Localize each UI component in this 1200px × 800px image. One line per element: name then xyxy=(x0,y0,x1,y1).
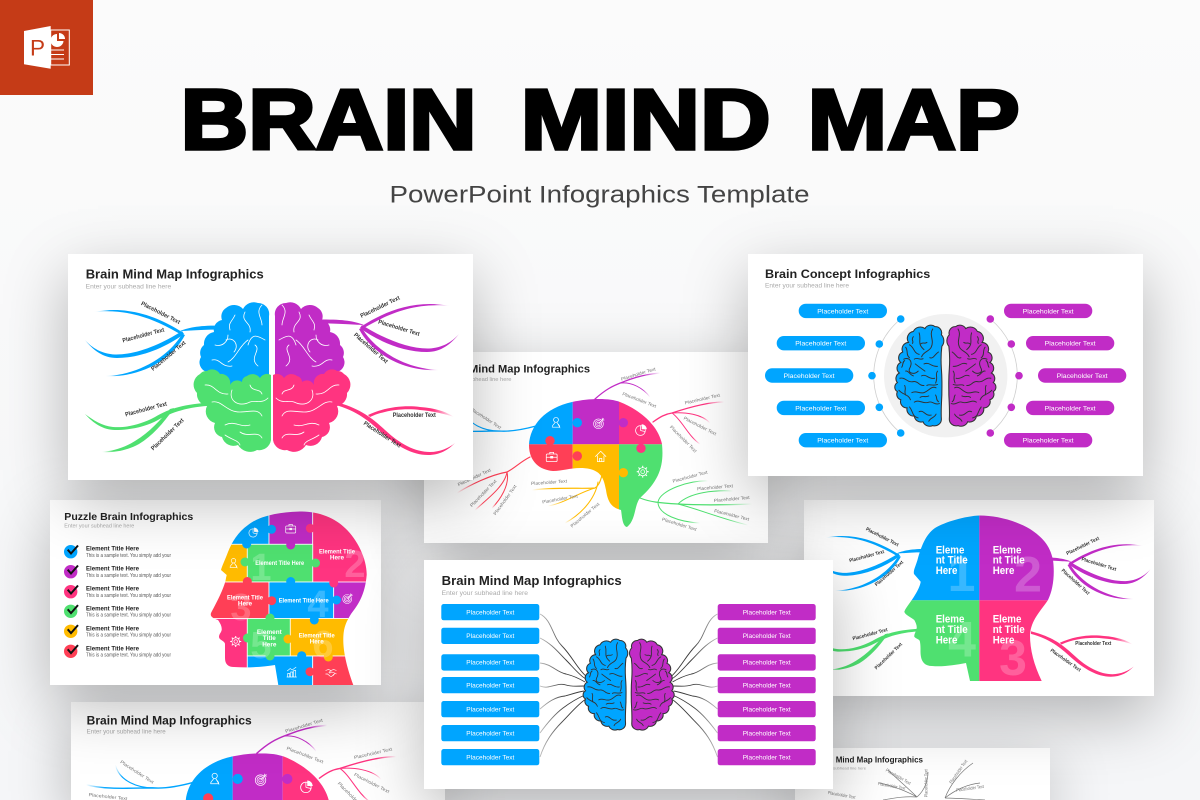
branch labels: Placeholder Text xyxy=(125,402,168,418)
purple dots xyxy=(986,315,1023,437)
piece numerals: 1 xyxy=(250,547,272,589)
branch labels: Placeholder Text xyxy=(669,425,698,454)
quadrant 1 label: Here xyxy=(936,565,957,577)
checklist item 2: Element Title Here xyxy=(86,567,140,573)
checklist item 2 xyxy=(64,565,171,579)
checklist item 1 xyxy=(64,545,171,559)
slide card: brain with button lists xyxy=(424,560,833,789)
slide subhead: Enter your subhead line here xyxy=(442,590,529,597)
pill labels: Placeholder Text xyxy=(817,438,868,445)
purple buttons xyxy=(718,604,816,765)
branch labels xyxy=(849,526,1117,674)
slide heading: Brain Mind Map Infographics xyxy=(813,755,923,765)
checklist item 6 xyxy=(64,645,171,659)
slide subhead: Enter your subhead line here xyxy=(438,377,512,383)
piece numerals: 6 xyxy=(312,624,334,666)
right wires xyxy=(670,614,718,757)
branch labels: Placeholder Text xyxy=(865,526,900,548)
branch labels: Placeholder Text xyxy=(924,769,928,797)
slide subhead: Enter your subhead line here xyxy=(64,524,135,530)
button labels xyxy=(466,609,791,761)
branch labels: Placeholder Text xyxy=(286,746,325,765)
piece labels: Element Title xyxy=(299,632,335,639)
branch labels xyxy=(457,366,751,532)
main title: MAP xyxy=(808,73,1020,168)
checklist item 6: Element Title Here xyxy=(86,646,140,652)
quadrant 3 label xyxy=(993,614,1025,646)
branch labels: Placeholder Text xyxy=(672,469,709,484)
puzzle head xyxy=(210,512,367,685)
thin gray mind map branches xyxy=(880,763,985,800)
piece icons xyxy=(230,524,353,677)
branch labels: Placeholder Text xyxy=(1049,648,1082,674)
slide card: head quadrants mind map xyxy=(804,500,1154,696)
branch labels: Placeholder Text xyxy=(956,784,985,793)
blue hemisphere xyxy=(583,639,628,730)
branch labels: Placeholder Text xyxy=(877,781,907,791)
piece numerals: 5 xyxy=(250,625,272,667)
branch labels: Placeholder Text xyxy=(570,501,601,528)
slide heading: Puzzle Brain Infographics xyxy=(64,512,194,523)
big numerals: 3 xyxy=(999,630,1027,686)
piece numerals: 2 xyxy=(344,544,366,586)
branch labels: Placeholder Text xyxy=(542,493,579,505)
puzzle brain with branches xyxy=(437,373,752,534)
quadrant 1 label xyxy=(936,544,968,577)
pink branches xyxy=(1031,631,1134,677)
subtitle: PowerPoint Infographics Template xyxy=(390,182,810,209)
checklist item 5: This is a sample text. You simply add your xyxy=(86,633,171,639)
button labels: Placeholder Text xyxy=(743,706,791,713)
branch labels: Placeholder Text xyxy=(1060,568,1091,597)
right hemisphere, purple and pink xyxy=(273,302,350,452)
button labels: Placeholder Text xyxy=(743,633,791,640)
checklist item 3 xyxy=(64,585,171,599)
piece labels: Here xyxy=(330,554,345,562)
checklist item 4 xyxy=(64,605,171,619)
green branches xyxy=(85,402,212,452)
quadrant 3 label: Eleme xyxy=(993,614,1021,626)
branch labels: Placeholder Text xyxy=(122,328,165,344)
branch labels: Placeholder Text xyxy=(697,483,734,491)
checklist item 4: This is a sample text. You simply add your xyxy=(86,613,171,619)
pink branches xyxy=(334,402,455,455)
button labels: Placeholder Text xyxy=(466,633,514,640)
purple hemisphere xyxy=(947,325,996,426)
checklist item 2: This is a sample text. You simply add your xyxy=(86,573,171,579)
slide heading: Brain Mind Map Infographics xyxy=(438,364,590,376)
blue buttons xyxy=(441,604,539,765)
slide heading: Brain Mind Map Infographics xyxy=(86,266,264,282)
checklist item 6: This is a sample text. You simply add your xyxy=(86,653,171,659)
main title: MIND xyxy=(521,73,771,168)
branch labels: Placeholder Text xyxy=(1066,536,1101,557)
quadrant 2 label: Here xyxy=(993,565,1014,577)
button labels: Placeholder Text xyxy=(743,682,791,689)
branch labels: Placeholder Text xyxy=(852,627,889,642)
branch labels: Placeholder Text xyxy=(393,413,436,419)
slide card: partial mind map, bottom right xyxy=(795,748,1050,800)
big numerals: 1 xyxy=(948,546,975,602)
big numerals xyxy=(948,546,1042,686)
pill labels: Placeholder Text xyxy=(1045,341,1096,348)
button labels: Placeholder Text xyxy=(466,682,514,689)
quadrant 4 label: Here xyxy=(936,634,957,646)
left wires xyxy=(540,614,587,757)
quadrant 3 label: nt Title xyxy=(993,624,1025,636)
branch labels xyxy=(122,295,436,452)
big numerals: 4 xyxy=(948,612,976,668)
branch labels: Placeholder Text xyxy=(353,746,393,760)
grey backdrop circle xyxy=(884,314,1007,437)
piece labels: Element xyxy=(257,629,283,636)
quadrant 2 label: nt Title xyxy=(993,555,1025,567)
branch labels: Placeholder Text xyxy=(948,758,969,785)
slide heading: Brain Concept Infographics xyxy=(765,267,931,281)
quadrant 2 label: Eleme xyxy=(993,544,1021,556)
piece numerals: 4 xyxy=(307,584,329,626)
piece labels: Element Title xyxy=(227,594,263,601)
branch labels: Placeholder Text xyxy=(377,320,420,338)
button labels: Placeholder Text xyxy=(466,660,514,667)
pill labels: Placeholder Text xyxy=(1057,373,1108,380)
slide card: four colour brain mind map xyxy=(68,254,473,480)
big numerals: 2 xyxy=(1014,547,1042,603)
branch labels: Placeholder Text xyxy=(1075,641,1112,647)
branch labels: Placeholder Text xyxy=(1081,557,1117,573)
pill labels: Placeholder Text xyxy=(795,405,846,412)
branch labels: Placeholder Text xyxy=(362,421,401,449)
branch labels: Placeholder Text xyxy=(352,332,389,365)
quadrant 4 label xyxy=(936,614,968,646)
pill labels: Placeholder Text xyxy=(1045,405,1096,412)
branch labels: Placeholder Text xyxy=(531,478,568,486)
purple branches xyxy=(1037,544,1151,599)
button labels: Placeholder Text xyxy=(743,609,791,616)
branch labels: Placeholder Text xyxy=(622,391,658,409)
slide heading: Brain Mind Map Infographics xyxy=(87,713,252,727)
purple pills xyxy=(1004,304,1126,447)
quadrant 1 label: nt Title xyxy=(936,555,968,567)
piece labels: Here xyxy=(310,638,324,646)
slide subhead: Enter your subhead line here xyxy=(813,765,867,770)
blue branches xyxy=(818,536,932,591)
branch labels: Placeholder Text xyxy=(469,478,498,508)
branch labels: Placeholder Text xyxy=(360,295,401,320)
connector arcs xyxy=(874,319,1017,433)
pill labels: Placeholder Text xyxy=(817,308,868,315)
checklist item 3: Element Title Here xyxy=(86,587,140,593)
piece numerals: 3 xyxy=(230,587,252,629)
branch labels: Placeholder Text xyxy=(661,517,698,532)
branch labels xyxy=(88,717,393,800)
branch labels: Placeholder Text xyxy=(683,416,718,437)
piece labels: Element Title xyxy=(319,548,355,555)
slide subhead: Enter your subhead line here xyxy=(765,284,850,290)
left hemisphere, blue and green xyxy=(194,302,271,452)
checklist item 3: This is a sample text. You simply add your xyxy=(86,593,171,599)
branch labels: Placeholder Text xyxy=(150,418,186,452)
branch labels: Placeholder Text xyxy=(714,495,751,503)
icon: PowerPoint badge xyxy=(0,0,93,95)
button labels: Placeholder Text xyxy=(466,754,514,761)
branch labels: Placeholder Text xyxy=(119,759,155,785)
button labels: Placeholder Text xyxy=(466,706,514,713)
button labels: Placeholder Text xyxy=(743,730,791,737)
branch labels: Placeholder Text xyxy=(620,366,657,382)
slide card: puzzle head preview, bottom left xyxy=(71,702,445,800)
blue branches xyxy=(85,310,222,376)
blue dots xyxy=(868,315,904,437)
quadrant 2 label xyxy=(993,544,1025,577)
checklist item 4: Element Title Here xyxy=(86,606,140,612)
purple branches xyxy=(322,304,459,370)
pill labels: Placeholder Text xyxy=(784,373,835,380)
branch labels: Placeholder Text xyxy=(140,301,181,326)
slide card: puzzle brain head with element list xyxy=(50,500,381,685)
button labels: Placeholder Text xyxy=(743,660,791,667)
puzzle brain with branches xyxy=(86,725,426,800)
pill labels: Placeholder Text xyxy=(795,341,846,348)
branch labels: Placeholder Text xyxy=(885,768,912,786)
piece labels: Title xyxy=(263,635,276,642)
head quadrants xyxy=(904,516,1054,681)
checklist item 5: Element Title Here xyxy=(86,626,140,632)
blue hemisphere xyxy=(895,325,944,426)
button labels: Placeholder Text xyxy=(466,730,514,737)
branch labels: Placeholder Text xyxy=(469,406,503,431)
branch labels: Placeholder Text xyxy=(285,717,324,734)
quadrant 4 label: Eleme xyxy=(936,614,964,626)
branch labels: Placeholder Text xyxy=(492,483,518,516)
quadrant 3 label: Here xyxy=(993,634,1014,646)
checklist item 1: This is a sample text. You simply add your xyxy=(86,553,171,559)
branch labels: Placeholder Text xyxy=(849,549,885,564)
checklist item 1: Element Title Here xyxy=(86,547,140,553)
button labels: Placeholder Text xyxy=(466,609,514,616)
branch labels: Placeholder Text xyxy=(353,772,391,794)
green branches xyxy=(815,629,920,670)
branch labels: Placeholder Text xyxy=(874,560,905,588)
pill labels xyxy=(784,308,1108,445)
branch labels: Placeholder Text xyxy=(874,642,904,671)
quadrant 1 label: Eleme xyxy=(936,544,964,556)
pill labels: Placeholder Text xyxy=(1023,308,1074,315)
branch labels: Placeholder Text xyxy=(684,392,721,405)
piece labels: Element Title Here xyxy=(279,597,329,604)
pill labels: Placeholder Text xyxy=(1023,438,1074,445)
piece labels xyxy=(227,548,355,649)
piece numerals xyxy=(230,544,366,667)
branch labels: Placeholder Text xyxy=(151,340,187,373)
button labels: Placeholder Text xyxy=(743,754,791,761)
slide subhead: Enter your subhead line here xyxy=(87,729,166,735)
slide heading: Brain Mind Map Infographics xyxy=(442,574,622,588)
branch labels xyxy=(827,758,985,800)
slide subhead: Enter your subhead line here xyxy=(86,283,172,290)
piece labels: Here xyxy=(238,600,253,608)
branch labels: Placeholder Text xyxy=(714,508,751,522)
branch labels: Placeholder Text xyxy=(457,467,492,487)
blue pills xyxy=(765,304,887,447)
slide card: brain concept xyxy=(748,254,1143,476)
piece labels: Here xyxy=(262,642,277,649)
icon: PowerPoint badge: P xyxy=(30,36,45,61)
piece labels: Element Title Here xyxy=(255,560,305,567)
quadrant 4 label: nt Title xyxy=(936,624,968,636)
slide card: puzzle brain mind map, centre xyxy=(424,352,768,543)
checklist item 5 xyxy=(64,625,171,639)
main title xyxy=(181,73,1020,168)
main title: BRAIN xyxy=(181,73,477,168)
purple hemisphere xyxy=(630,639,674,730)
